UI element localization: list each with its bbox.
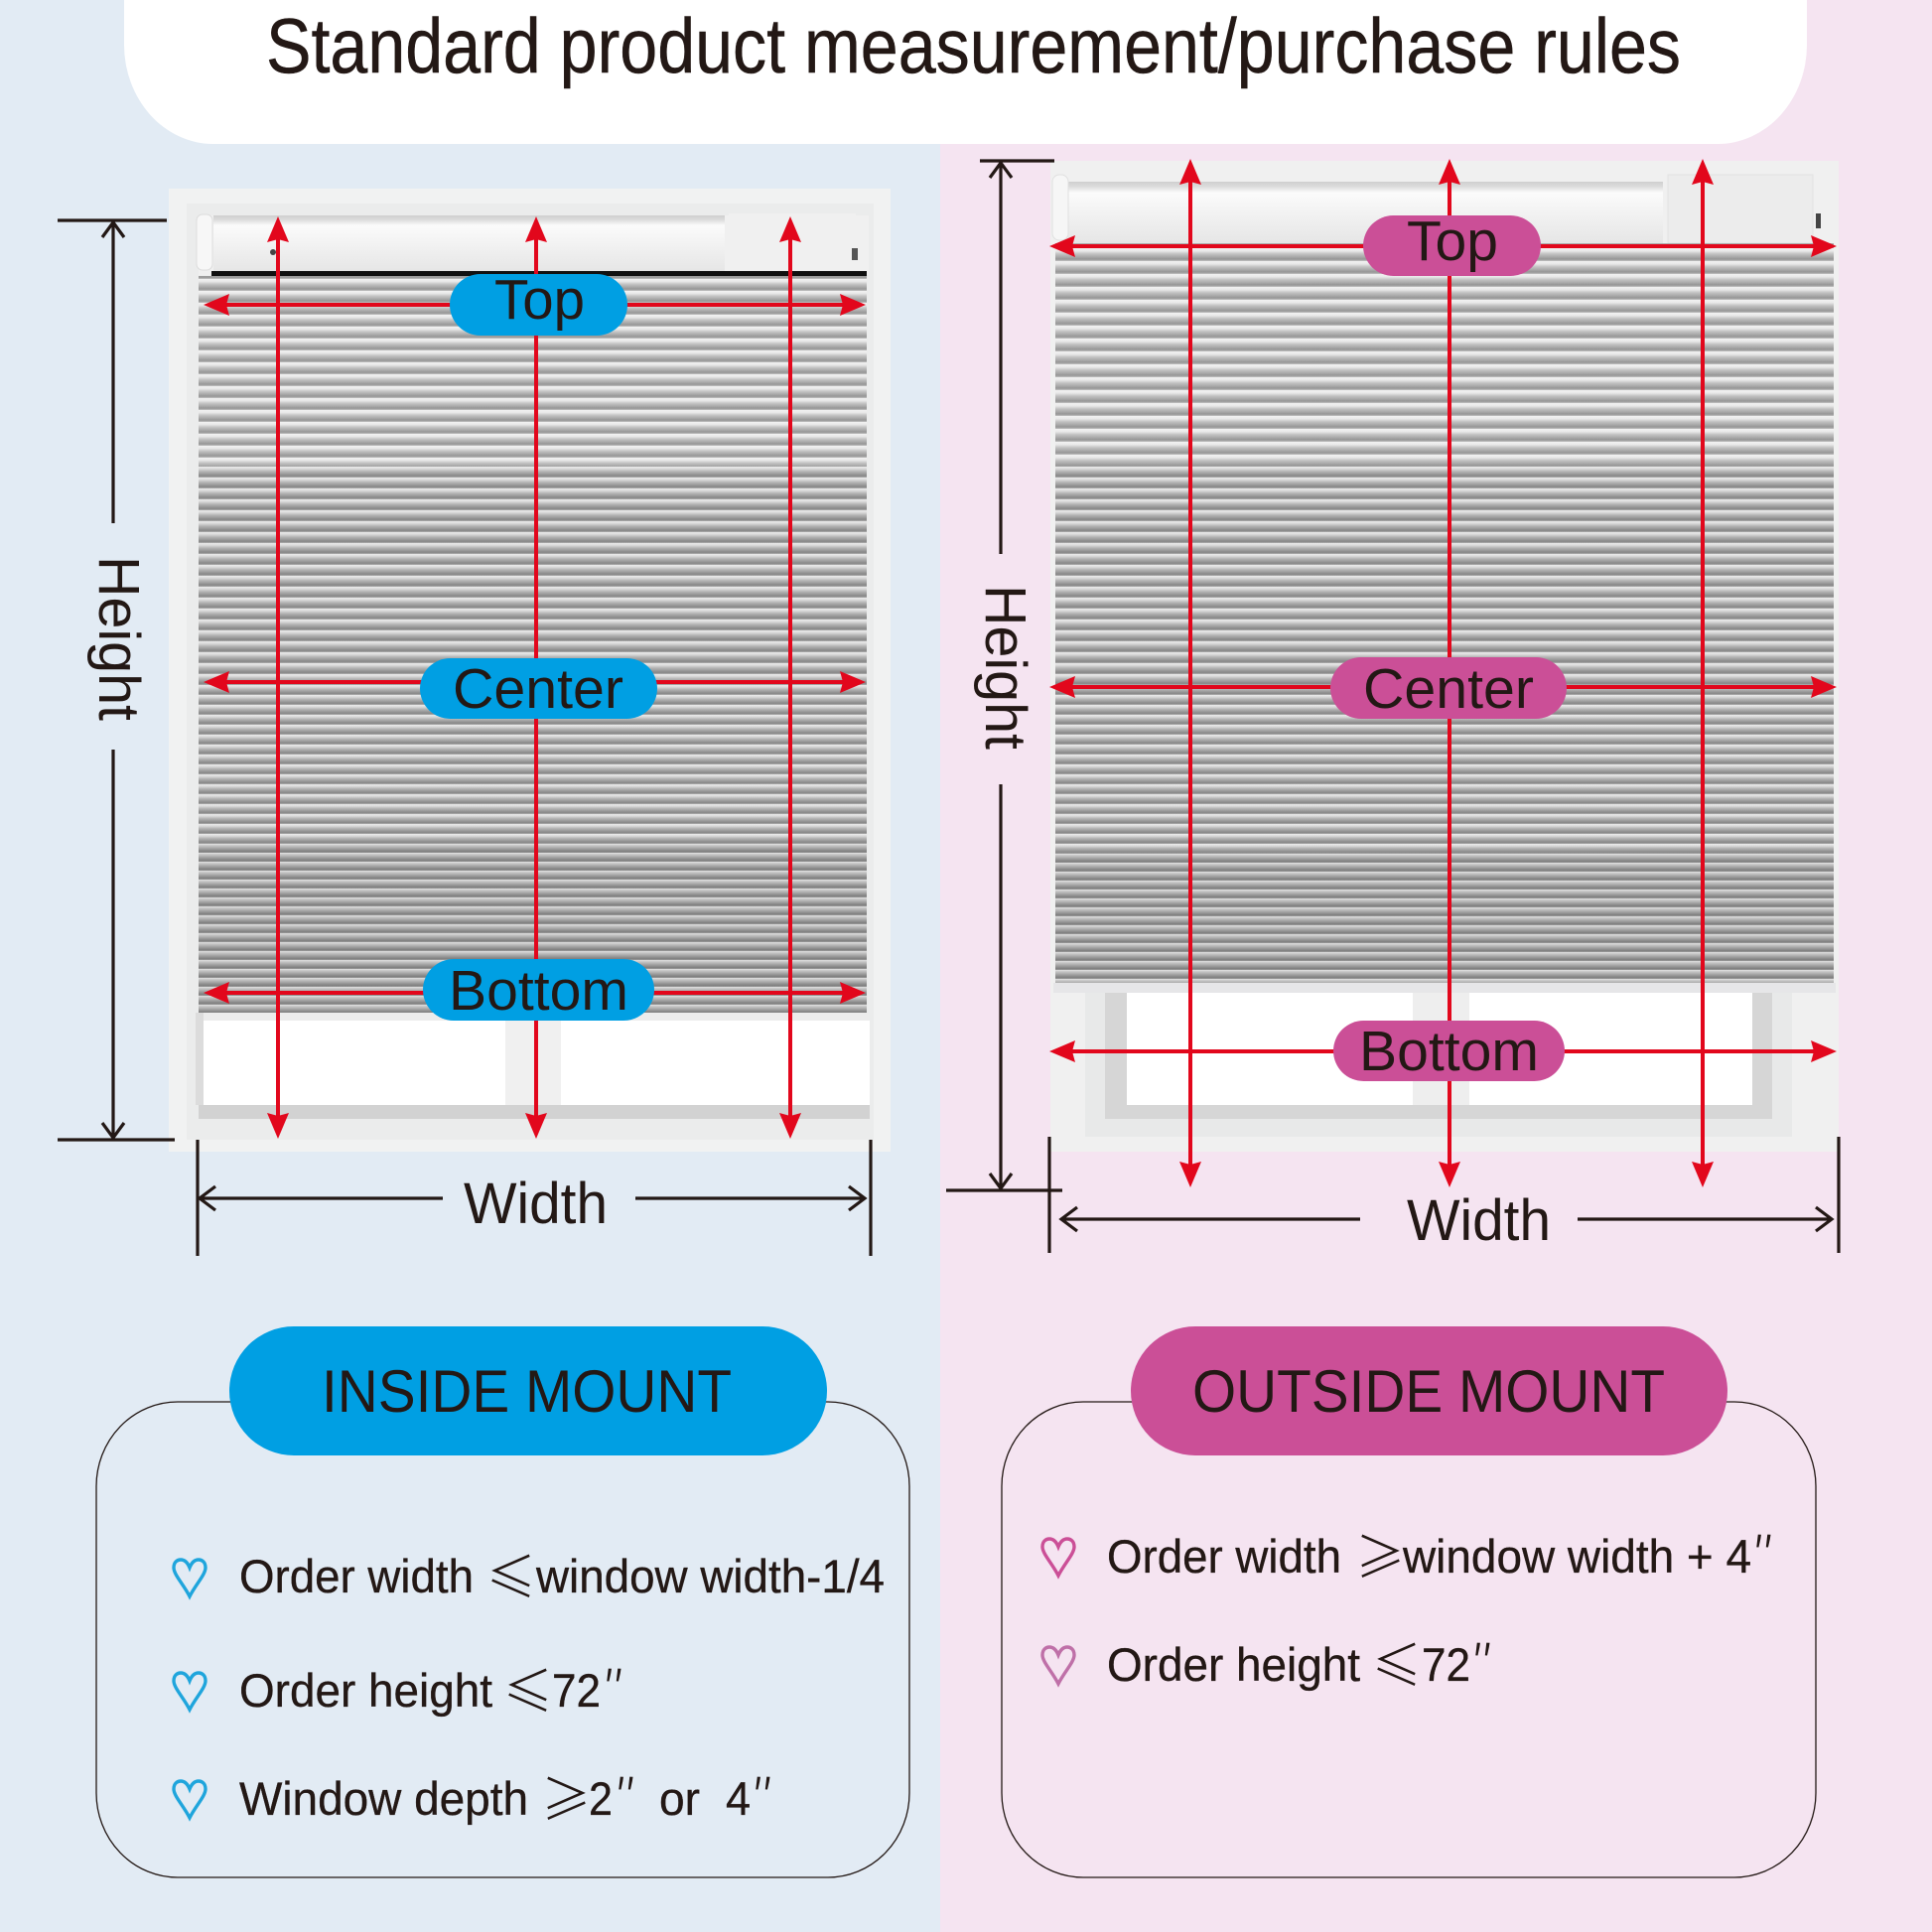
- rule: order width: ≤: [486, 1534, 536, 1612]
- pill: top: Top: [1407, 209, 1498, 273]
- rule: order height: [174, 1647, 625, 1726]
- panel: inside mount diagram: [58, 189, 891, 1256]
- background: right pink half: [940, 0, 1932, 1932]
- rule: window depth: [174, 1755, 774, 1835]
- outlined rules box: [1002, 1402, 1816, 1877]
- heading pill: inside mount: INSIDE MOUNT: [322, 1358, 732, 1425]
- icon: heart: [1042, 1539, 1074, 1576]
- title banner: [124, 0, 1807, 144]
- red vertical measure lines: [267, 216, 801, 1139]
- rule: order height: Order height: [239, 1664, 492, 1717]
- rule: order height: [1042, 1621, 1494, 1701]
- red horizontal measure lines: [1049, 235, 1837, 1062]
- height dimension: [58, 220, 175, 1140]
- rule: order height: 72: [552, 1664, 601, 1717]
- heading pill: outside mount: OUTSIDE MOUNT: [1192, 1358, 1665, 1425]
- rule: window depth: Window depth: [239, 1772, 528, 1825]
- heading pill: outside mount: [1131, 1326, 1727, 1455]
- rule: order width: Order width: [1107, 1530, 1341, 1583]
- rule: order width: window width + 4: [1402, 1530, 1751, 1583]
- panel: outside mount diagram: [946, 159, 1839, 1253]
- rule: order height: ≤: [503, 1648, 553, 1726]
- icon: heart: [1042, 1647, 1074, 1684]
- pill: bottom: Bottom: [1359, 1020, 1539, 1083]
- outlined rules box: [96, 1402, 909, 1877]
- rule: order width: ″: [1751, 1513, 1775, 1591]
- rule: window depth: or: [659, 1772, 700, 1825]
- red horizontal measure lines: [204, 294, 866, 1004]
- rule: order height: 72: [1422, 1638, 1470, 1691]
- icon: heart: [174, 1781, 206, 1818]
- height dimension: Height: [973, 585, 1037, 750]
- rule: window depth: 2: [589, 1772, 613, 1825]
- icon: heart: [174, 1560, 206, 1596]
- width dimension: Width: [1407, 1188, 1551, 1253]
- pill: center: Center: [1363, 657, 1534, 721]
- rule: order height: Order height: [1107, 1638, 1360, 1691]
- pill: top: [450, 268, 627, 336]
- inside mount blind photo: [169, 189, 891, 1152]
- height dimension: [946, 161, 1062, 1190]
- panel: inside mount rules: [96, 1326, 909, 1877]
- icon: heart: [174, 1673, 206, 1710]
- rule: order width: ≥: [1355, 1514, 1405, 1592]
- rule: order width: window width-1/4: [535, 1550, 885, 1602]
- outside mount blind photo: [1050, 161, 1839, 1152]
- rule: window depth: ″: [751, 1755, 774, 1834]
- red vertical measure lines: [1179, 159, 1714, 1187]
- rule: order height: ″: [602, 1647, 625, 1725]
- pill: center: Center: [453, 657, 623, 721]
- heading pill: inside mount: [229, 1326, 827, 1455]
- height dimension: Height: [86, 556, 151, 721]
- rule: window depth: ″: [614, 1755, 637, 1834]
- rule: window depth: ≥: [541, 1756, 591, 1835]
- rule: order width: [1042, 1513, 1775, 1592]
- title text: Standard product measurement/purchase rules: [266, 2, 1681, 89]
- width dimension: [198, 1140, 871, 1256]
- rule: order height: ≤: [1372, 1622, 1422, 1701]
- panel: outside mount rules: [1002, 1326, 1816, 1877]
- pill: top: Top: [494, 268, 585, 332]
- rule: order width: [174, 1534, 885, 1612]
- rule: order height: ″: [1470, 1621, 1494, 1700]
- rule: window depth: 4: [726, 1772, 751, 1825]
- width dimension: Width: [464, 1172, 608, 1236]
- background: left blue half: [0, 0, 940, 1932]
- width dimension: [1049, 1137, 1839, 1253]
- pill: top: [1363, 209, 1541, 276]
- rule: order width: Order width: [239, 1550, 474, 1602]
- pill: bottom: Bottom: [449, 959, 628, 1023]
